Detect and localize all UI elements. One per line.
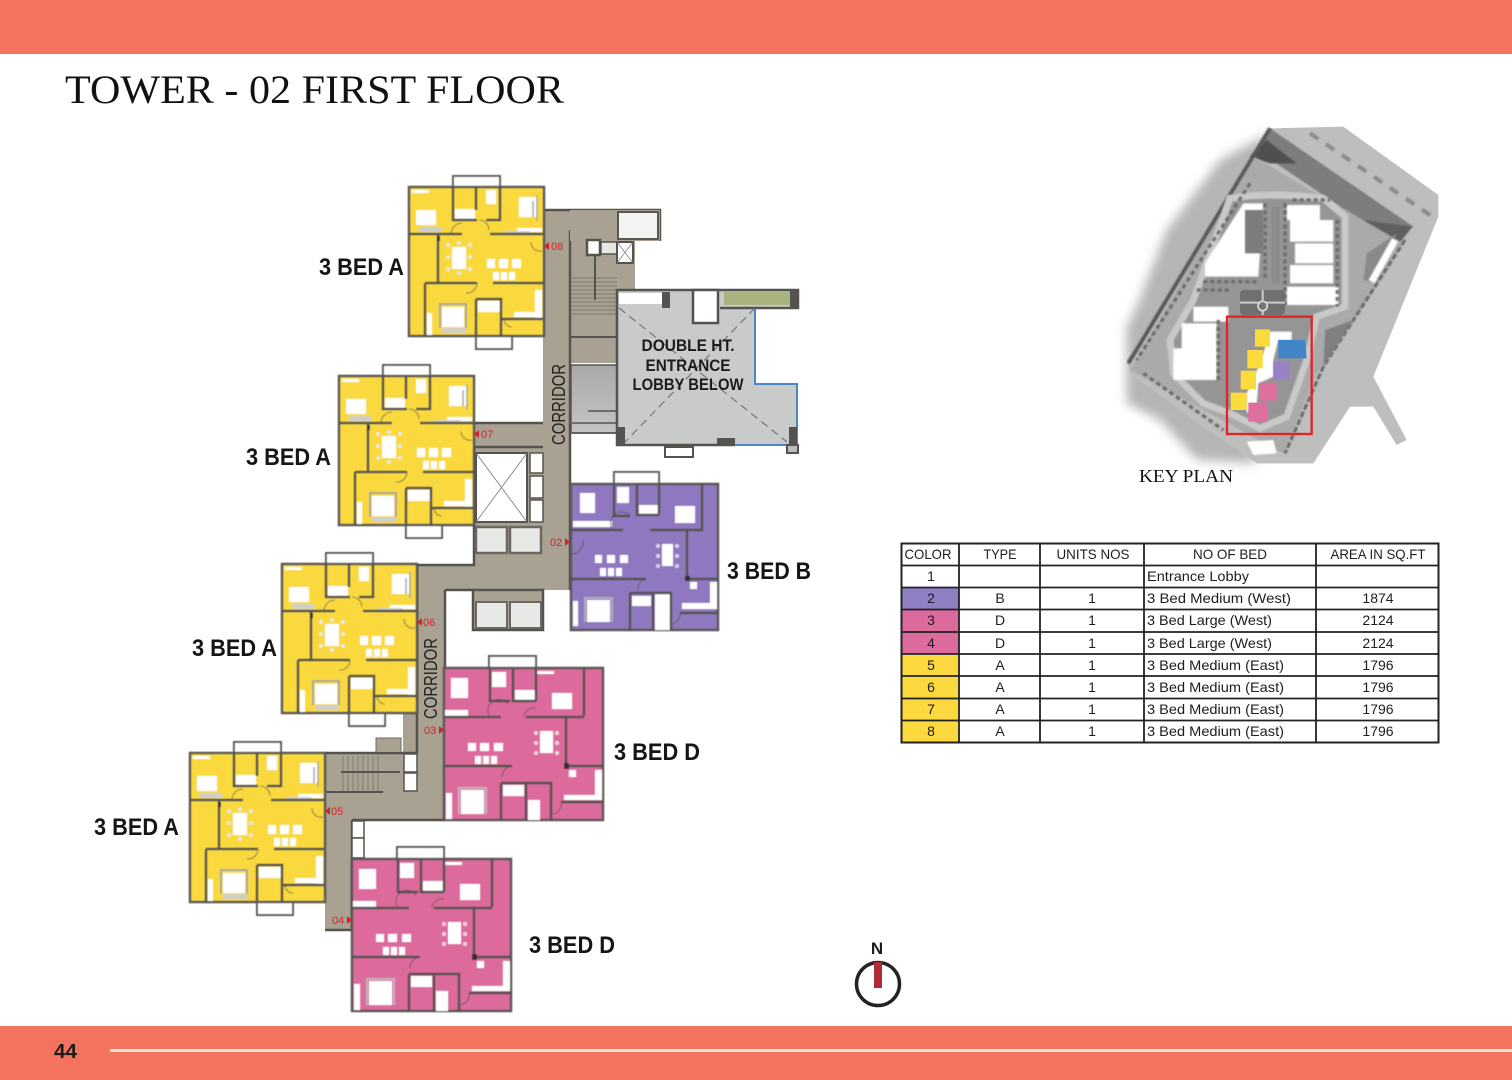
site ground	[1127, 127, 1438, 463]
unit number markers: 07	[481, 429, 493, 441]
red highlight box	[1227, 317, 1312, 434]
table header	[904, 546, 1426, 562]
table header: COLOR	[904, 546, 952, 562]
unit 06: 3 bed A	[282, 553, 417, 726]
row 5: 5	[927, 657, 935, 673]
unit 03: 3 bed D	[444, 656, 603, 820]
north compass: N	[871, 939, 883, 958]
unit number markers: 04	[332, 915, 344, 927]
row 6	[927, 679, 1394, 695]
key plan caption: KEY PLAN	[1139, 466, 1233, 486]
footer band	[0, 1026, 1512, 1080]
site surroundings haze	[1127, 133, 1268, 463]
row 2	[927, 590, 1394, 606]
row 5: A	[995, 657, 1005, 673]
unit type labels	[94, 254, 811, 959]
row 3: 3 Bed Large (West)	[1147, 612, 1272, 628]
unit number markers: 02	[550, 537, 562, 549]
row 8: 1	[1088, 723, 1096, 739]
row 5: 3 Bed Medium (East)	[1147, 657, 1284, 673]
row 3: 2124	[1362, 612, 1394, 628]
unit type labels: 3 BED B	[727, 558, 811, 585]
lower staircase and ducts	[326, 738, 417, 858]
row 8: 3 Bed Medium (East)	[1147, 723, 1284, 739]
lobby label: DOUBLE HT.	[642, 336, 734, 355]
unit type labels: 3 BED A	[319, 254, 404, 281]
row 2: 3 Bed Medium (West)	[1147, 590, 1291, 606]
floor plan	[94, 176, 811, 1011]
row 5	[927, 657, 1394, 673]
row 8	[927, 723, 1394, 739]
lobby label: LOBBY BELOW	[632, 375, 744, 394]
unit number markers: 06	[423, 617, 435, 629]
row 8: 1796	[1362, 723, 1394, 739]
unit table	[901, 543, 1439, 743]
row 4	[927, 635, 1394, 651]
unit number markers: 05	[331, 806, 343, 818]
corridor and core	[325, 210, 660, 930]
row 6: 1796	[1362, 679, 1394, 695]
key plan site map	[1127, 127, 1438, 463]
unit number markers: 03	[424, 725, 436, 737]
lobby label	[632, 336, 744, 394]
row 8: A	[995, 723, 1005, 739]
white building blocks	[1173, 203, 1338, 455]
inner plot	[1128, 128, 1405, 453]
row 6: 6	[927, 679, 935, 695]
row 2: 1	[1088, 590, 1096, 606]
row 4: 3 Bed Large (West)	[1147, 635, 1272, 651]
row 7: 7	[927, 701, 935, 717]
tree lines	[1197, 200, 1337, 380]
unit type labels: 3 BED D	[614, 739, 700, 766]
row 1	[927, 568, 1249, 584]
unit type labels: 3 BED D	[529, 932, 615, 959]
corridor label lower: CORRIDOR	[421, 638, 441, 719]
row 7: 1796	[1362, 701, 1394, 717]
row 6: 3 Bed Medium (East)	[1147, 679, 1284, 695]
lift shaft	[476, 453, 543, 553]
upper staircase and lift	[570, 210, 660, 337]
row 1: 1	[927, 568, 935, 584]
row 2: 1874	[1362, 590, 1394, 606]
table header: NO OF BED	[1193, 546, 1267, 562]
grey service room	[571, 365, 617, 433]
entrance lobby	[617, 290, 798, 457]
tower footprints	[1231, 329, 1307, 422]
unit type labels: 3 BED A	[94, 814, 179, 841]
unit type labels: 3 BED A	[192, 635, 277, 662]
row 7: 1	[1088, 701, 1096, 717]
unit 02: 3 bed B	[571, 472, 718, 630]
lobby label: ENTRANCE	[646, 356, 730, 375]
page number: 44	[54, 1041, 78, 1063]
colour swatches	[902, 588, 959, 743]
corridor label upper: CORRIDOR	[549, 364, 569, 445]
row 4: 1	[1088, 635, 1096, 651]
lower lifts	[473, 590, 543, 630]
row 3: 1	[1088, 612, 1096, 628]
row 3: D	[995, 612, 1005, 628]
title: TOWER - 02 FIRST FLOOR	[65, 67, 564, 112]
row 6: 1	[1088, 679, 1096, 695]
north compass	[856, 939, 900, 1006]
row 3	[927, 612, 1394, 628]
row 8: 8	[927, 723, 935, 739]
header band	[0, 0, 1512, 54]
row 2: 2	[927, 590, 935, 606]
unit 07: 3 bed A	[339, 365, 474, 538]
row 5: 1	[1088, 657, 1096, 673]
row 4: D	[995, 635, 1005, 651]
table header: UNITS NOS	[1056, 546, 1130, 562]
row 7	[927, 701, 1394, 717]
unit 08: 3 bed A	[409, 176, 544, 349]
unit 05: 3 bed A	[190, 742, 325, 915]
row 2: B	[995, 590, 1005, 606]
unit type labels: 3 BED A	[246, 444, 331, 471]
unit 04: 3 bed D	[352, 847, 511, 1011]
row 3: 3	[927, 612, 935, 628]
row 4: 2124	[1362, 635, 1394, 651]
row 5: 1796	[1362, 657, 1394, 673]
table header: TYPE	[984, 546, 1016, 562]
table header: AREA IN SQ.FT	[1330, 546, 1426, 562]
row 6: A	[995, 679, 1005, 695]
row 7: 3 Bed Medium (East)	[1147, 701, 1284, 717]
unit number markers	[325, 241, 570, 927]
row 1: Entrance Lobby	[1147, 568, 1249, 584]
unit number markers: 08	[551, 241, 563, 253]
row 4: 4	[927, 635, 935, 651]
central garden plaza	[1240, 207, 1285, 315]
north road strip	[1257, 128, 1413, 245]
row 7: A	[995, 701, 1005, 717]
